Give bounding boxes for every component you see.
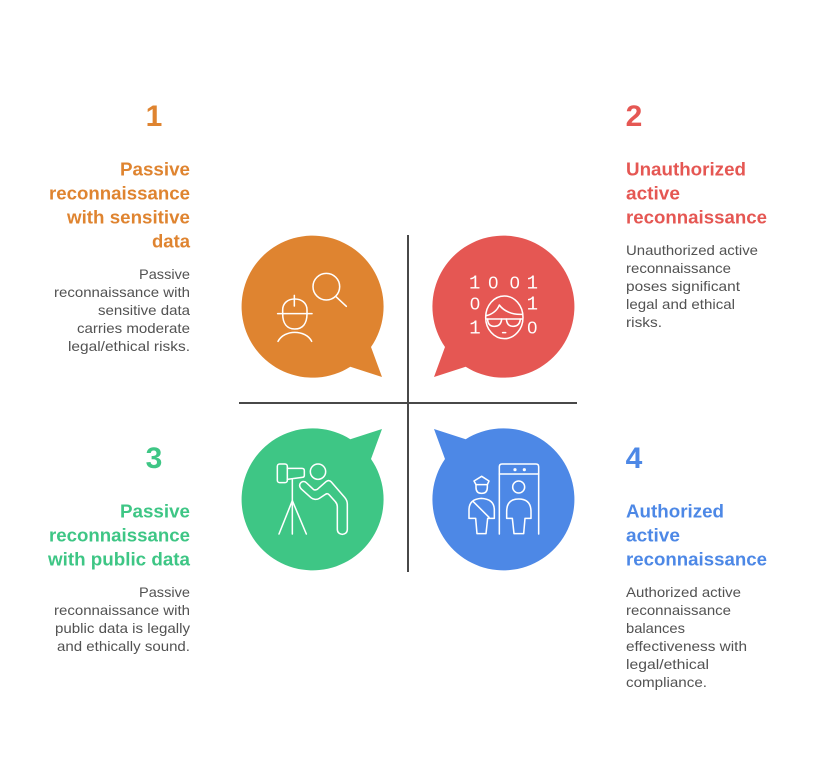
- heading: passive reconnaissance with public data: reconnaissance: [49, 524, 190, 546]
- description 2: risks.: [626, 314, 662, 330]
- description 1: carries moderate: [77, 320, 190, 336]
- description 4: effectiveness with: [626, 638, 747, 654]
- quadrant axes: [239, 235, 577, 572]
- heading: unauthorized active reconnaissance: reconnaissance: [626, 206, 767, 228]
- description 4: reconnaissance: [626, 602, 731, 618]
- icon: guard and security scanner: [469, 464, 539, 534]
- bubble 4: blue speech bubble: [432, 428, 574, 570]
- panel: quadrant 1 text: [49, 100, 191, 354]
- bubble 3: green speech bubble: [242, 428, 384, 570]
- icon: binary digits and hacker face: [469, 272, 538, 340]
- description 2: legal and ethical: [626, 296, 735, 312]
- heading: unauthorized active reconnaissance: Unauthorized: [626, 158, 746, 180]
- description 2: poses significant: [626, 278, 740, 294]
- panel: quadrant 2 text: [626, 100, 767, 330]
- number 4: 4: [626, 442, 643, 475]
- description 1: [54, 266, 190, 354]
- panel: quadrant 3 text: [47, 442, 191, 654]
- heading: passive reconnaissance with sensitive data: Passive: [120, 158, 190, 180]
- icon: worker and magnifier: [278, 273, 346, 341]
- description 3: and ethically sound.: [57, 638, 190, 654]
- description 1: reconnaissance with: [54, 284, 190, 300]
- binary digits: 1: [469, 272, 480, 294]
- description 3: public data is legally: [55, 620, 190, 636]
- binary digits: 1: [469, 318, 481, 340]
- binary digits: 0: [488, 272, 498, 292]
- heading: authorized active reconnaissance: active: [626, 524, 680, 546]
- heading: authorized active reconnaissance: [626, 500, 767, 570]
- description 4: [626, 584, 747, 690]
- description 3: Passive: [139, 584, 190, 600]
- heading: passive reconnaissance with sensitive data: [49, 158, 191, 252]
- heading: authorized active reconnaissance: reconnaissance: [626, 548, 767, 570]
- binary digits: 1: [527, 293, 538, 315]
- panel: quadrant 4 text: [626, 442, 767, 690]
- description 1: sensitive data: [98, 302, 190, 318]
- number 1: 1: [146, 100, 162, 133]
- heading: unauthorized active reconnaissance: active: [626, 182, 680, 204]
- heading: passive reconnaissance with public data: Passive: [120, 500, 190, 522]
- bubble 1: orange speech bubble: [242, 236, 384, 378]
- number 3: 3: [146, 442, 162, 475]
- description 3: [54, 584, 190, 654]
- description 2: [626, 242, 758, 330]
- description 1: Passive: [139, 266, 190, 282]
- binary digits: 0: [527, 318, 537, 338]
- binary digits: [469, 272, 538, 340]
- description 4: legal/ethical: [626, 656, 709, 672]
- icon: person with telescope: [277, 464, 347, 534]
- binary digits: 0: [470, 293, 480, 313]
- binary digits: 1: [527, 272, 538, 294]
- description 3: reconnaissance with: [54, 602, 190, 618]
- description 4: Authorized active: [626, 584, 741, 600]
- heading: passive reconnaissance with sensitive data: reconnaissance: [49, 182, 190, 204]
- heading: passive reconnaissance with public data: with public data: [47, 548, 191, 570]
- description 4: compliance.: [626, 674, 707, 690]
- heading: authorized active reconnaissance: Authorized: [626, 500, 724, 522]
- description 4: balances: [626, 620, 685, 636]
- heading: unauthorized active reconnaissance: [626, 158, 767, 228]
- number 2: 2: [626, 100, 642, 133]
- heading: passive reconnaissance with public data: [47, 500, 191, 570]
- heading: passive reconnaissance with sensitive data: with sensitive: [66, 206, 190, 228]
- description 2: Unauthorized active: [626, 242, 758, 258]
- heading: passive reconnaissance with sensitive data: data: [152, 230, 191, 252]
- binary digits: 0: [510, 272, 520, 292]
- description 2: reconnaissance: [626, 260, 731, 276]
- bubble 2: red speech bubble: [432, 236, 574, 378]
- description 1: legal/ethical risks.: [68, 338, 190, 354]
- hacker face: [486, 296, 523, 339]
